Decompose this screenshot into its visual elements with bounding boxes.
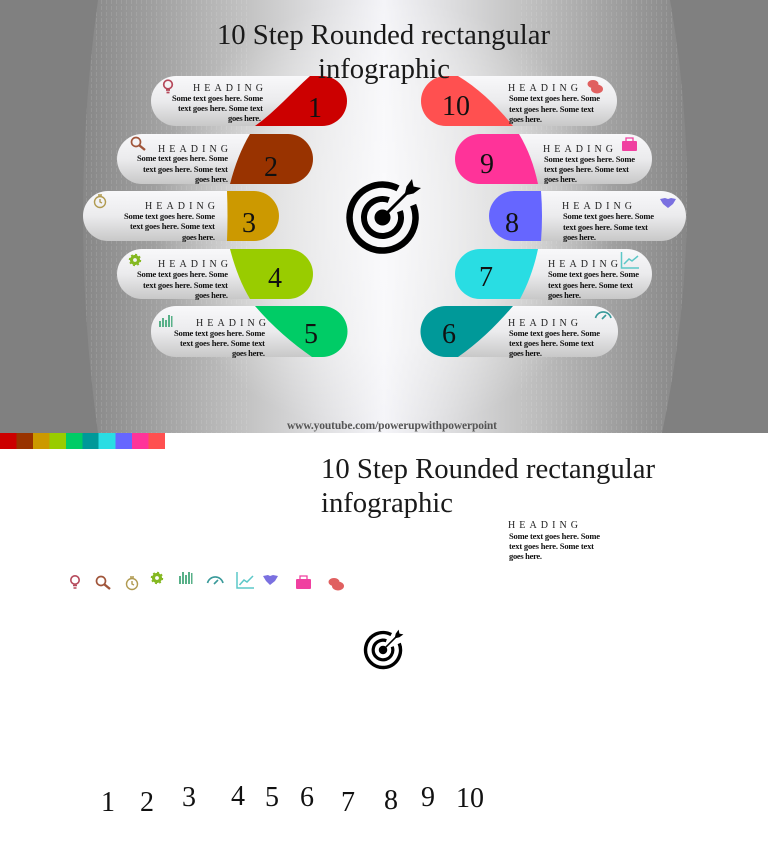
step numbers: 3 xyxy=(242,208,256,239)
step numbers: 2 xyxy=(264,152,278,183)
step 3 text: HEADING xyxy=(145,201,215,212)
icon: magnifier xyxy=(132,138,145,150)
spare gauge xyxy=(208,577,223,584)
step 10 text: goes here. xyxy=(509,114,542,124)
step 6 text: Some text goes here. Some xyxy=(509,328,600,338)
background panel xyxy=(0,0,768,433)
step 4 text xyxy=(137,259,228,300)
spare numbers: 4 xyxy=(231,781,245,812)
spare magnifier xyxy=(96,576,110,589)
spare gear xyxy=(152,572,162,584)
spare target icon xyxy=(366,630,403,668)
cap 5 xyxy=(255,306,348,357)
cap 8 xyxy=(489,191,542,241)
cap 4 xyxy=(230,249,313,299)
icon: target with arrow xyxy=(350,179,421,251)
step numbers xyxy=(242,91,519,350)
left pills xyxy=(83,76,347,357)
step 9 text: text goes here. Some text xyxy=(544,164,629,174)
cap 2 xyxy=(230,134,313,184)
step 8 text xyxy=(562,201,654,242)
step 2 text: goes here. xyxy=(195,174,228,184)
spare title: 10 Step Rounded rectangular xyxy=(321,453,655,485)
step numbers: 4 xyxy=(268,263,282,294)
spare numbers: 3 xyxy=(182,782,196,813)
step 10 text: Some text goes here. Some xyxy=(509,93,600,103)
step 9 text: Some text goes here. Some xyxy=(544,154,635,164)
spare numbers: 1 xyxy=(101,787,115,818)
step 3 text: goes here. xyxy=(182,232,215,242)
step numbers: 8 xyxy=(505,208,519,239)
pill 4 xyxy=(117,249,313,299)
step 6 text: HEADING xyxy=(508,318,578,329)
spare numbers: 6 xyxy=(300,782,314,813)
step 8 text: text goes here. Some text xyxy=(563,222,648,232)
step 4 text: HEADING xyxy=(158,259,228,270)
pill 2 xyxy=(117,134,313,184)
pill 7 xyxy=(455,249,652,299)
spare briefcase xyxy=(296,576,311,589)
icon: line chart xyxy=(622,252,639,268)
step 6 text xyxy=(508,318,600,358)
step 9 text: goes here. xyxy=(544,174,577,184)
step 5 text: Some text goes here. Some xyxy=(174,328,265,338)
spare numbers: 9 xyxy=(421,782,435,813)
step numbers: 5 xyxy=(304,319,318,350)
step 4 text: text goes here. Some text xyxy=(143,280,228,290)
step 1 text: Some text goes here. Some xyxy=(172,93,263,103)
step numbers: 9 xyxy=(480,149,494,180)
step 10 text: HEADING xyxy=(508,83,578,94)
spare handshake xyxy=(263,575,278,585)
icon: briefcase xyxy=(622,138,637,151)
icon: stopwatch xyxy=(94,195,106,208)
step 3 text: Some text goes here. Some xyxy=(124,211,215,221)
spare text block: goes here. xyxy=(509,551,542,561)
step numbers: 10 xyxy=(442,91,470,122)
icon: coins xyxy=(588,80,603,94)
step 10 text: text goes here. Some text xyxy=(509,104,594,114)
step 1 text xyxy=(172,83,263,123)
step 2 text: Some text goes here. Some xyxy=(137,153,228,163)
spare text block xyxy=(508,520,600,561)
icon: bulb xyxy=(164,80,172,92)
spare line chart xyxy=(237,572,254,588)
title: infographic xyxy=(318,53,450,85)
step 7 text: Some text goes here. Some xyxy=(548,269,639,279)
step 5 text: goes here. xyxy=(232,348,265,358)
step 1 text: goes here. xyxy=(228,113,261,123)
spare text block: Some text goes here. Some xyxy=(509,531,600,541)
step 7 text: goes here. xyxy=(548,290,581,300)
spare numbers: 2 xyxy=(140,787,154,818)
cap 1 xyxy=(255,76,347,126)
step 3 text: text goes here. Some text xyxy=(130,221,215,231)
title: 10 Step Rounded rectangular xyxy=(217,19,550,51)
step 6 text: text goes here. Some text xyxy=(509,338,594,348)
step numbers: 6 xyxy=(442,319,456,350)
pill 10 xyxy=(421,76,617,126)
step 5 text: HEADING xyxy=(196,318,266,329)
cap 10 xyxy=(421,76,513,126)
spare numbers xyxy=(101,781,484,818)
step 4 text: Some text goes here. Some xyxy=(137,269,228,279)
step 8 text: Some text goes here. Some xyxy=(563,211,654,221)
step 5 text xyxy=(174,318,266,358)
spare icon row xyxy=(71,572,344,590)
step 7 text xyxy=(548,259,639,300)
step 2 text xyxy=(137,144,228,184)
step 9 text: HEADING xyxy=(543,144,613,155)
pill 6 xyxy=(421,306,618,357)
spare bar chart xyxy=(179,572,192,584)
step 5 text: text goes here. Some text xyxy=(180,338,265,348)
step 7 text: HEADING xyxy=(548,259,618,270)
step 2 text: HEADING xyxy=(158,144,228,155)
spare numbers: 8 xyxy=(384,785,398,816)
coloured step caps xyxy=(227,76,542,357)
pill 5 xyxy=(151,306,347,357)
spare title xyxy=(321,453,655,519)
spare title: infographic xyxy=(321,487,453,519)
step 6 text: goes here. xyxy=(509,348,542,358)
pill 1 xyxy=(151,76,347,126)
colour swatches xyxy=(0,433,165,449)
spare numbers: 7 xyxy=(341,787,355,818)
step numbers: 7 xyxy=(479,262,493,293)
pill 8 xyxy=(489,191,686,241)
spare coins xyxy=(328,578,344,590)
footer url: www.youtube.com/powerupwithpowerpoint xyxy=(287,420,497,432)
cap 3 xyxy=(227,191,279,241)
spare stopwatch xyxy=(126,577,138,590)
spare bulb xyxy=(71,576,79,588)
step 7 text: text goes here. Some text xyxy=(548,280,633,290)
spare numbers: 10 xyxy=(456,783,484,814)
cap 6 xyxy=(420,306,513,357)
cap 9 xyxy=(455,134,538,184)
step 2 text: text goes here. Some text xyxy=(143,164,228,174)
icon: gauge xyxy=(596,312,611,319)
step 10 text xyxy=(508,83,600,124)
step 3 text xyxy=(124,201,215,242)
pill 3 xyxy=(83,191,279,241)
step 9 text xyxy=(543,144,635,184)
right pills xyxy=(421,76,686,357)
spare numbers: 5 xyxy=(265,782,279,813)
step 8 text: goes here. xyxy=(563,232,596,242)
spare text block: HEADING xyxy=(508,520,578,531)
step 8 text: HEADING xyxy=(562,201,632,212)
step 4 text: goes here. xyxy=(195,290,228,300)
pill 9 xyxy=(455,134,652,184)
icon: bar chart xyxy=(159,315,172,327)
icon: gear xyxy=(130,254,140,266)
spare text block: text goes here. Some text xyxy=(509,541,594,551)
step numbers: 1 xyxy=(308,93,322,124)
step 1 text: HEADING xyxy=(193,83,263,94)
title xyxy=(217,19,550,85)
icon: handshake xyxy=(660,198,676,208)
step 1 text: text goes here. Some text xyxy=(178,103,263,113)
cap 7 xyxy=(455,249,538,299)
